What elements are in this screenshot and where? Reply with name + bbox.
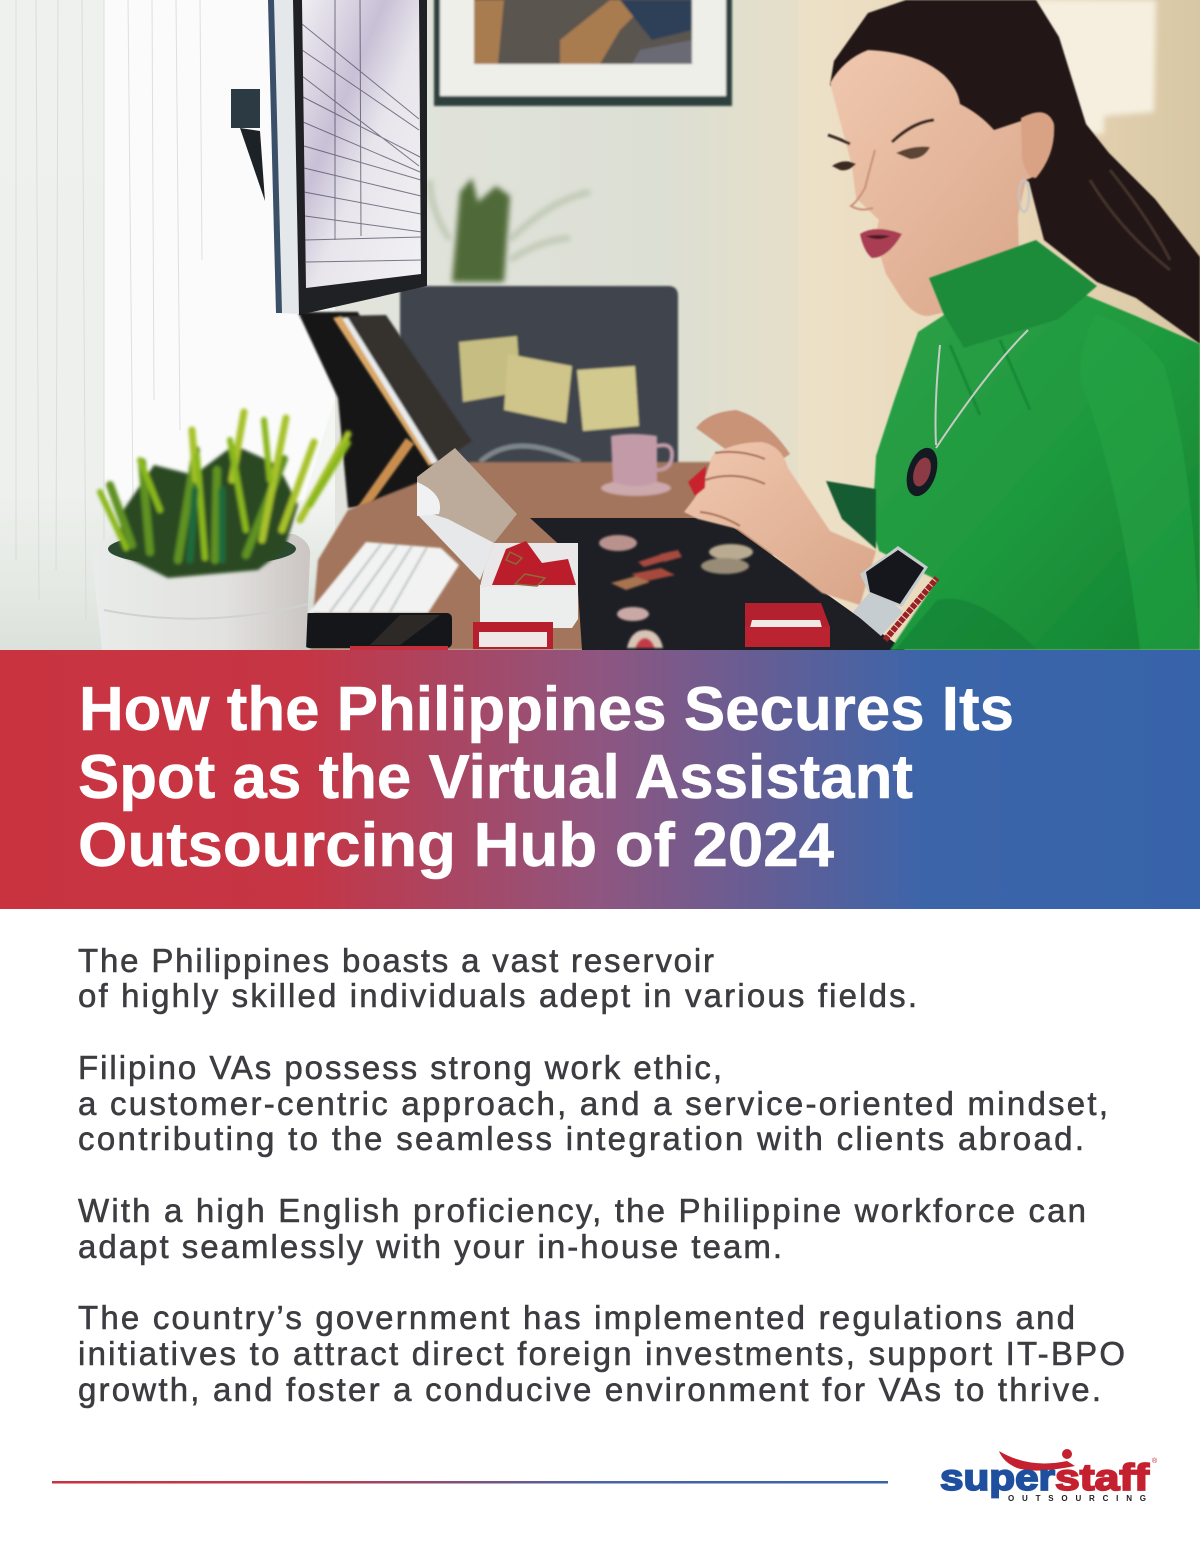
tablet on wooden stand <box>332 313 472 507</box>
paragraph: skilled talent: of highly skilled individuals adept in various fields. <box>78 977 917 1014</box>
logo: SuperStaff Outsourcing: OUTSOURCING <box>1008 1494 1146 1503</box>
foreground plant <box>100 412 348 578</box>
title: Outsourcing Hub of 2024 <box>78 811 835 880</box>
curtain <box>0 0 335 650</box>
necklace and pendant <box>901 330 1028 500</box>
lips <box>860 229 902 258</box>
logo: SuperStaff Outsourcing: staff <box>1055 1457 1150 1498</box>
title banner <box>0 650 1200 909</box>
paragraph: government support: growth, and foster a conducive environment for VAs to thrive. <box>78 1371 1101 1408</box>
paragraph: skilled talent <box>78 942 917 1014</box>
woman face and neck <box>828 50 1054 316</box>
title: How the Philippines Secures Its <box>79 675 1014 744</box>
paragraph: English proficiency: adapt seamlessly with your in-house team. <box>78 1228 782 1265</box>
pink cup and saucer <box>601 434 672 496</box>
logo: SuperStaff Outsourcing: super <box>940 1457 1055 1498</box>
green sweater <box>826 240 1200 650</box>
hero photo: woman working at desk <box>0 0 1200 650</box>
title: Spot as the Virtual Assistant <box>78 743 913 812</box>
gift box with lid <box>417 448 578 649</box>
smart watch <box>853 546 937 640</box>
small red box <box>745 603 830 647</box>
paragraph: work ethic: Filipino VAs possess strong work ethic, <box>78 1049 722 1086</box>
paragraph: government support <box>78 1299 1125 1408</box>
logo: SuperStaff Outsourcing: ® <box>1152 1457 1158 1465</box>
paragraph: English proficiency: With a high English proficiency, the Philippine workforce can <box>78 1192 1086 1229</box>
black mat <box>530 518 905 650</box>
paragraph: English proficiency <box>78 1192 1086 1265</box>
eyebrow and eye details <box>828 120 934 210</box>
lamp shade <box>1032 0 1156 134</box>
paragraph: skilled talent: The Philippines boasts a vast reservoir <box>78 942 714 979</box>
paragraph: work ethic <box>78 1049 1108 1157</box>
white plant pot <box>92 532 310 650</box>
title <box>78 675 1014 880</box>
wall <box>300 0 1200 650</box>
footer gradient line <box>52 1481 888 1484</box>
paragraph: government support: initiatives to attract direct foreign investments, support IT-BPO <box>78 1335 1125 1372</box>
framed picture <box>434 0 732 106</box>
blurred background plant <box>430 178 590 282</box>
wooden desk <box>310 462 800 650</box>
monitor with spreadsheet <box>231 0 427 315</box>
paragraph: work ethic: contributing to the seamless integration with clients abroad. <box>78 1120 1084 1157</box>
monitor stand <box>298 312 438 508</box>
phone <box>304 613 452 650</box>
hands <box>684 410 876 605</box>
jewellery medallions <box>599 535 753 648</box>
paragraph: government support: The country’s government has implemented regulations and <box>78 1299 1075 1336</box>
woman hair <box>830 0 1200 344</box>
logo: SuperStaff Outsourcing <box>940 1449 1158 1503</box>
laptop back with sticky notes <box>400 286 678 470</box>
paragraph: work ethic: a customer-centric approach, and a service-oriented mindset, <box>78 1085 1108 1122</box>
keyboard <box>308 542 459 613</box>
